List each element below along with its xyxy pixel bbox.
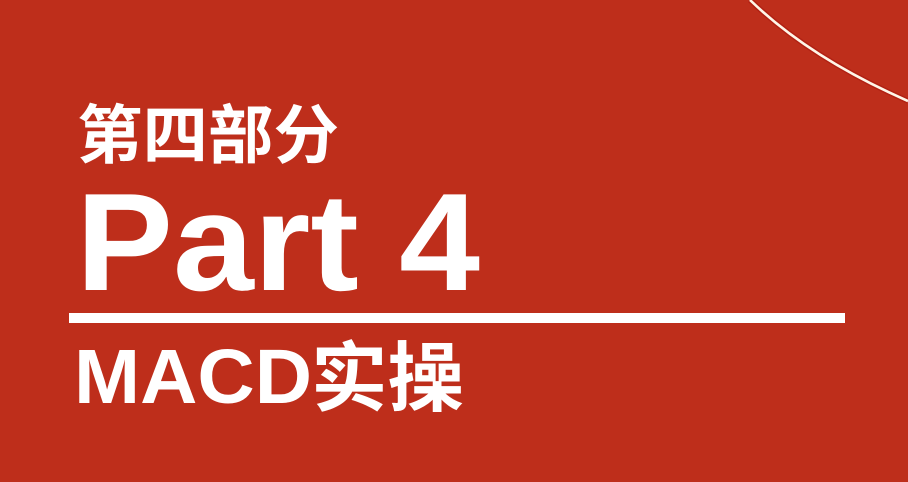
decorative corner arc	[750, 0, 908, 101]
divider rule	[69, 313, 845, 323]
subtitle: MACD实操: 实操	[311, 337, 464, 422]
subtitle: MACD实操	[74, 334, 464, 422]
section label: 第四部分: 第四部分	[77, 100, 339, 172]
subtitle: MACD实操: MACD	[74, 334, 312, 420]
heading: Part 4: Part 4	[76, 165, 480, 320]
